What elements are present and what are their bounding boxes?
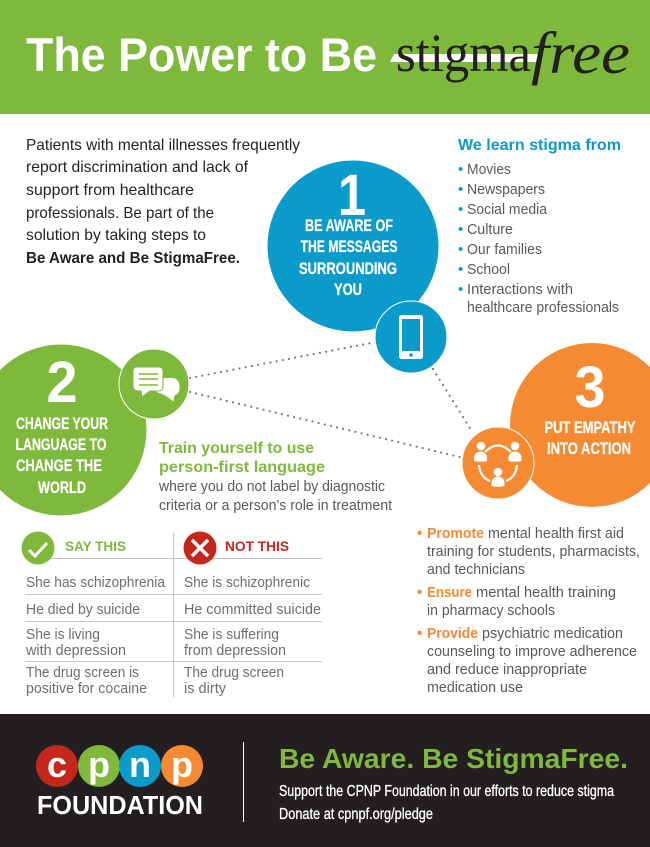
list: we learn stigma from: Movies [467,161,511,178]
intro paragraph: report discrimination and lack of [26,159,249,176]
panel: step 3 circle [510,343,650,507]
icon: cross [184,532,216,564]
panel: step 2 circle: LANGUAGE TO [16,435,106,454]
list: we learn stigma from: • [458,201,463,218]
table rows: The drug screen is [26,664,139,681]
list: we learn stigma from: Social media [467,201,548,218]
list: empathy actions: in pharmacy schools [427,602,555,619]
table rows: The drug screen [184,664,284,681]
text: person-first language: criteria or a person’s role in treatment [159,497,393,514]
stigmafree wordmark [396,20,630,86]
panel: step 1 circle: SURROUNDING [299,259,397,278]
panel: step 2 circle [0,344,146,516]
list: we learn stigma from: Newspapers [467,181,545,198]
list: empathy actions: • [417,525,422,542]
panel: step 2 circle: CHANGE THE [16,456,102,475]
text: person-first language: Train yourself to use [159,440,314,457]
list: empathy actions: mental health first aid [488,525,624,542]
logo: cpnp foundation: p [88,744,110,785]
icon: phone [375,301,447,373]
table rows: She is living [26,626,100,643]
panel: step 2 circle: CHANGE YOUR [16,414,108,433]
table rows: from depression [184,642,286,659]
intro paragraph: support from healthcare [26,182,194,199]
panel: step 2 circle: 2 [46,350,78,415]
table rows: He died by suicide [26,601,140,618]
list: we learn stigma from: • [458,261,463,278]
panel: step 1 circle [268,160,438,332]
logo: cpnp foundation: c [47,744,67,785]
list: we learn stigma from: • [458,221,463,238]
table rows: with depression [25,642,126,659]
list: we learn stigma from: We learn stigma from [458,137,621,154]
heading: not this: NOT THIS [225,538,289,554]
panel: step 3 circle: 3 [574,355,606,420]
intro paragraph [26,137,300,267]
stigmafree wordmark: stigma [396,23,531,83]
table rows: positive for cocaine [26,680,147,697]
list: empathy actions: • [417,625,422,642]
list: we learn stigma from: Interactions with [467,281,573,298]
list: empathy actions: medication use [427,679,523,696]
panel: step 1 circle: THE MESSAGES [300,237,398,256]
footer call to action: Donate at cpnpf.org/pledge [279,806,433,823]
list: we learn stigma from: healthcare professionals [467,299,619,316]
text: person-first language [158,440,393,514]
list: empathy actions: Ensure [427,584,472,601]
title: The Power to Be [26,28,377,81]
list: empathy actions: Provide [427,625,478,642]
logo: cpnp foundation [36,744,203,820]
list: we learn stigma from: • [458,161,463,178]
intro paragraph: Patients with mental illnesses frequently [26,137,300,154]
heading: say this: SAY THIS [65,538,126,554]
header banner [0,0,650,114]
logo: cpnp foundation: FOUNDATION [37,790,203,820]
footer call to action [279,783,614,823]
stigmafree wordmark: free [531,20,630,86]
table rows: She has schizophrenia [26,574,166,591]
list: we learn stigma from [458,137,621,316]
list: we learn stigma from: Culture [467,221,513,238]
list: empathy actions: counseling to improve adherence [427,643,637,660]
logo: cpnp foundation: n [129,744,151,785]
list: empathy actions: training for students, pharmacists, [427,543,640,560]
strike stroke [390,54,538,62]
text: person-first language: where you do not label by diagnostic [158,478,385,495]
list: we learn stigma from: • [458,241,463,258]
table rows [25,574,321,697]
intro paragraph: Be Aware and Be StigmaFree. [26,250,240,267]
panel: step 1 circle: YOU [334,280,362,299]
panel: step 1 circle: BE AWARE OF [305,216,393,235]
table: say this vs not this [22,532,322,697]
list: empathy actions: • [417,584,422,601]
list: we learn stigma from: • [458,281,463,298]
list: empathy actions: mental health training [476,584,616,601]
list: empathy actions: psychiatric medication [482,625,623,642]
list: we learn stigma from: School [467,261,510,278]
table rows: She is schizophrenic [184,574,310,591]
intro paragraph: professionals. Be part of the [26,205,214,222]
icon: speech bubbles [119,349,189,419]
footer band [0,714,650,847]
table rows: is dirty [184,680,226,697]
table rows: He committed suicide [184,601,321,618]
icon: people circle [462,427,534,499]
intro paragraph: solution by taking steps to [26,227,206,244]
list: empathy actions: and reduce inappropriate [427,661,587,678]
panel: step 1 circle: 1 [338,163,366,228]
icon: check [22,532,54,564]
text: person-first language: person-first language [159,459,325,476]
footer tagline: Be Aware. Be StigmaFree. [279,743,628,774]
list: we learn stigma from: Our families [467,241,542,258]
list: empathy actions: Promote [427,525,484,542]
logo: cpnp foundation: p [171,744,193,785]
table rows: She is suffering [184,626,279,643]
list: empathy actions [417,525,640,696]
dotted connectors [190,342,473,458]
list: empathy actions: and technicians [427,561,525,578]
list: we learn stigma from: • [458,181,463,198]
panel: step 2 circle: WORLD [38,478,86,497]
